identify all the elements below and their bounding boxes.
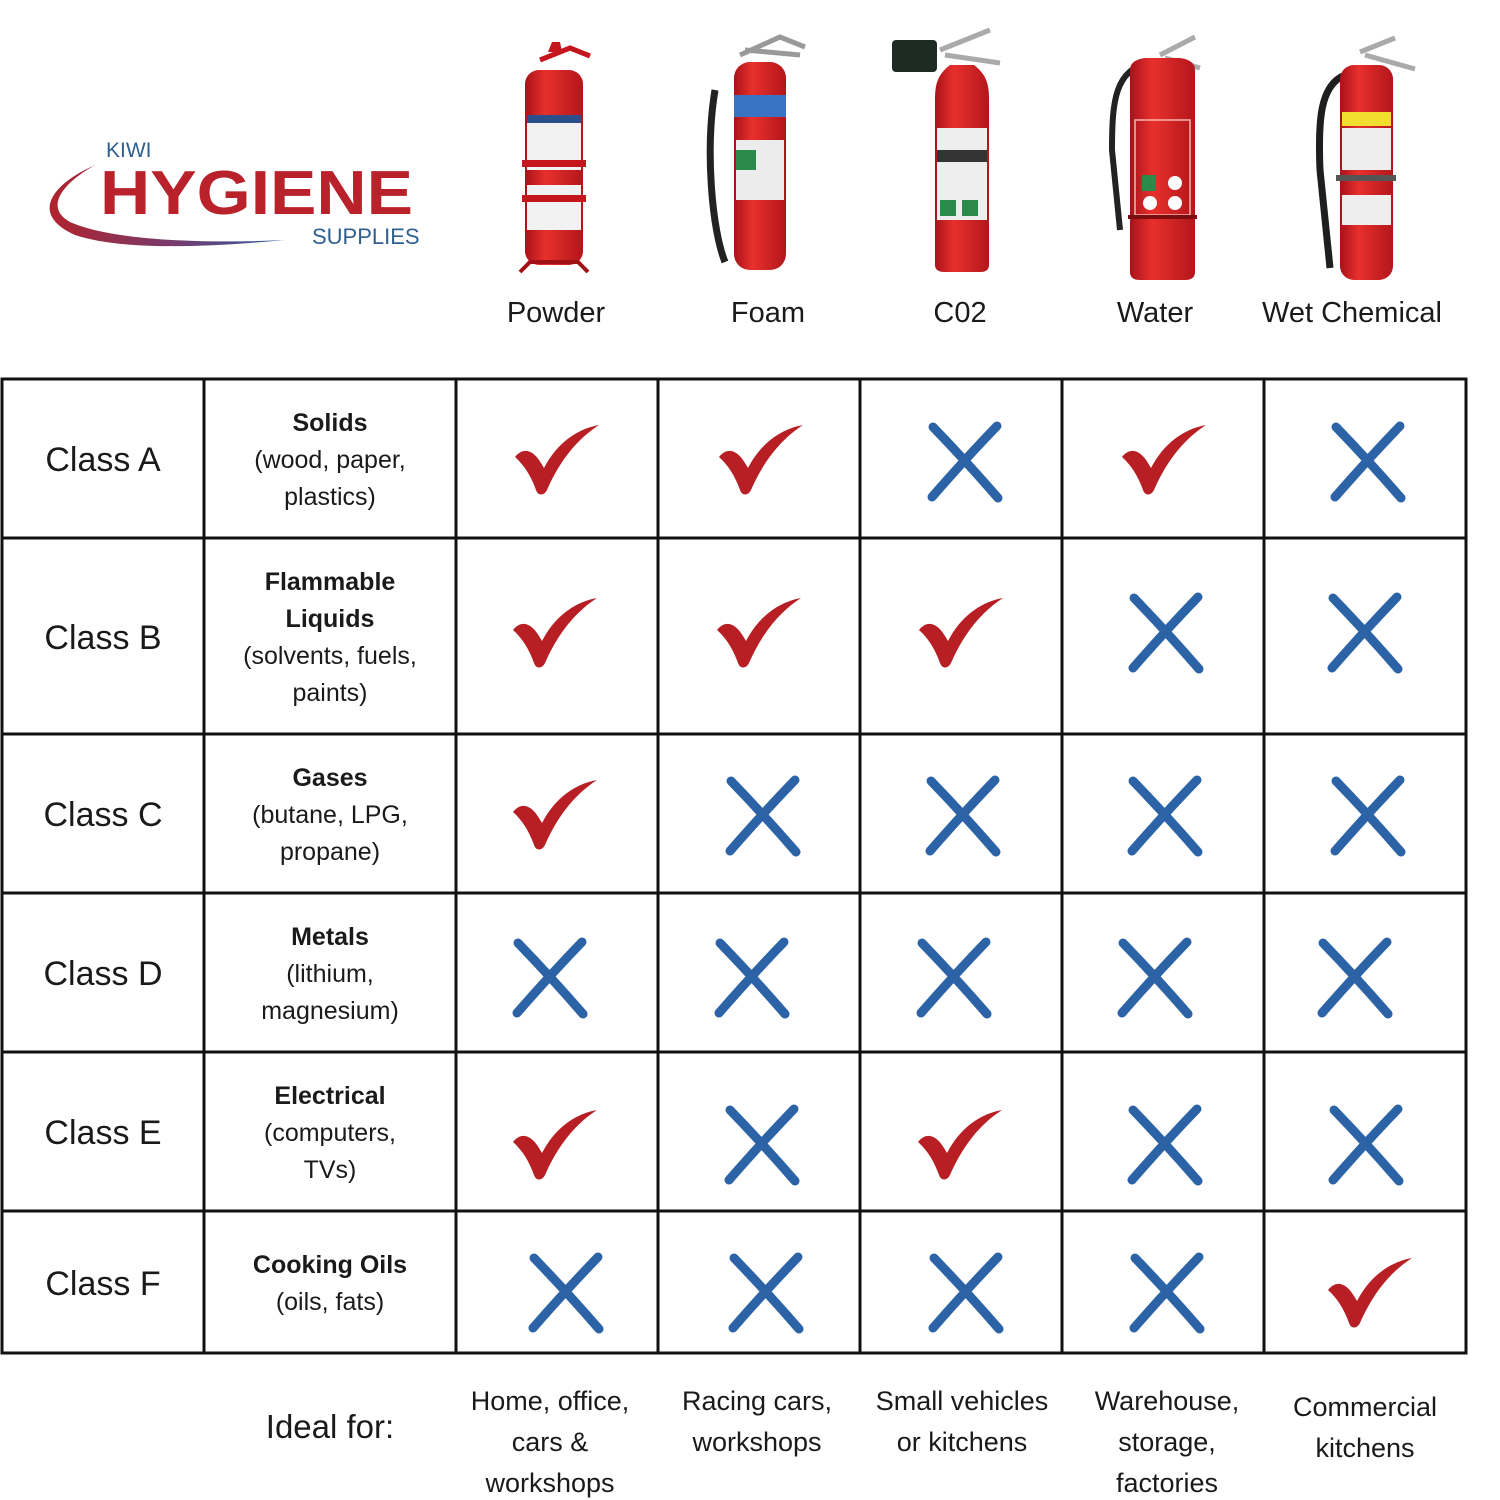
ideal for row [266,1386,1437,1498]
extinguisher: CO2 [892,30,1000,272]
ideal for row: storage, [1118,1427,1216,1457]
extinguisher: foam [710,37,805,270]
fire type descriptions: (wood, paper, [254,446,406,474]
extinguisher: water [1112,37,1200,280]
fire type descriptions: Electrical [274,1082,386,1110]
suitability marks [513,425,1412,1329]
extinguisher type labels [507,297,1442,329]
extinguisher type labels: Powder [507,297,606,329]
fire type descriptions: Flammable [265,568,395,596]
fire type descriptions [243,409,417,1316]
ideal for row: cars & [512,1427,588,1457]
ideal for row: or kitchens [897,1427,1027,1457]
ideal for row: workshops [691,1427,822,1457]
table grid [2,379,1466,1353]
logo: Kiwi Hygiene Supplies: KIWI [106,139,152,162]
logo: Kiwi Hygiene Supplies: SUPPLIES [312,224,420,249]
fire type descriptions: paints) [292,679,368,707]
fire type descriptions: (lithium, [286,960,374,988]
class labels: Class B [44,619,162,657]
class labels: Class F [45,1265,161,1303]
fire type descriptions: propane) [280,838,380,866]
class labels: Class C [43,796,163,834]
ideal for row: Warehouse, [1095,1386,1239,1416]
fire type descriptions: plastics) [284,483,376,511]
fire type descriptions: Solids [292,409,368,437]
logo: Kiwi Hygiene Supplies [50,139,420,249]
class labels [43,441,163,1303]
ideal for row: kitchens [1315,1433,1415,1463]
logo: Kiwi Hygiene Supplies: HYGIENE [100,159,413,228]
extinguisher type labels: C02 [933,297,987,329]
fire type descriptions: Metals [291,923,369,951]
fire type descriptions: (oils, fats) [276,1288,384,1316]
fire type descriptions: (solvents, fuels, [243,642,417,670]
class labels: Class D [43,955,163,993]
extinguisher type labels: Foam [731,297,805,329]
ideal for row: Home, office, [471,1386,629,1416]
ideal for row: Ideal for: [266,1408,394,1445]
fire type descriptions: magnesium) [261,997,399,1025]
extinguisher: powder [520,42,590,272]
fire type descriptions: Cooking Oils [253,1251,407,1279]
fire type descriptions: TVs) [304,1156,356,1184]
extinguisher: wet chemical [1319,38,1415,280]
fire type descriptions: Liquids [286,605,374,633]
ideal for row: Small vehicles [876,1386,1048,1416]
ideal for row: workshops [484,1468,615,1498]
fire type descriptions: (butane, LPG, [252,801,408,829]
extinguisher type labels: Water [1117,297,1193,329]
ideal for row: Racing cars, [682,1386,832,1416]
ideal for row: factories [1116,1468,1218,1498]
fire type descriptions: Gases [292,764,368,792]
class labels: Class E [44,1114,162,1152]
ideal for row: Commercial [1293,1392,1437,1422]
extinguisher type labels: Wet Chemical [1262,297,1442,329]
fire type descriptions: (computers, [264,1119,396,1147]
class labels: Class A [45,441,161,479]
